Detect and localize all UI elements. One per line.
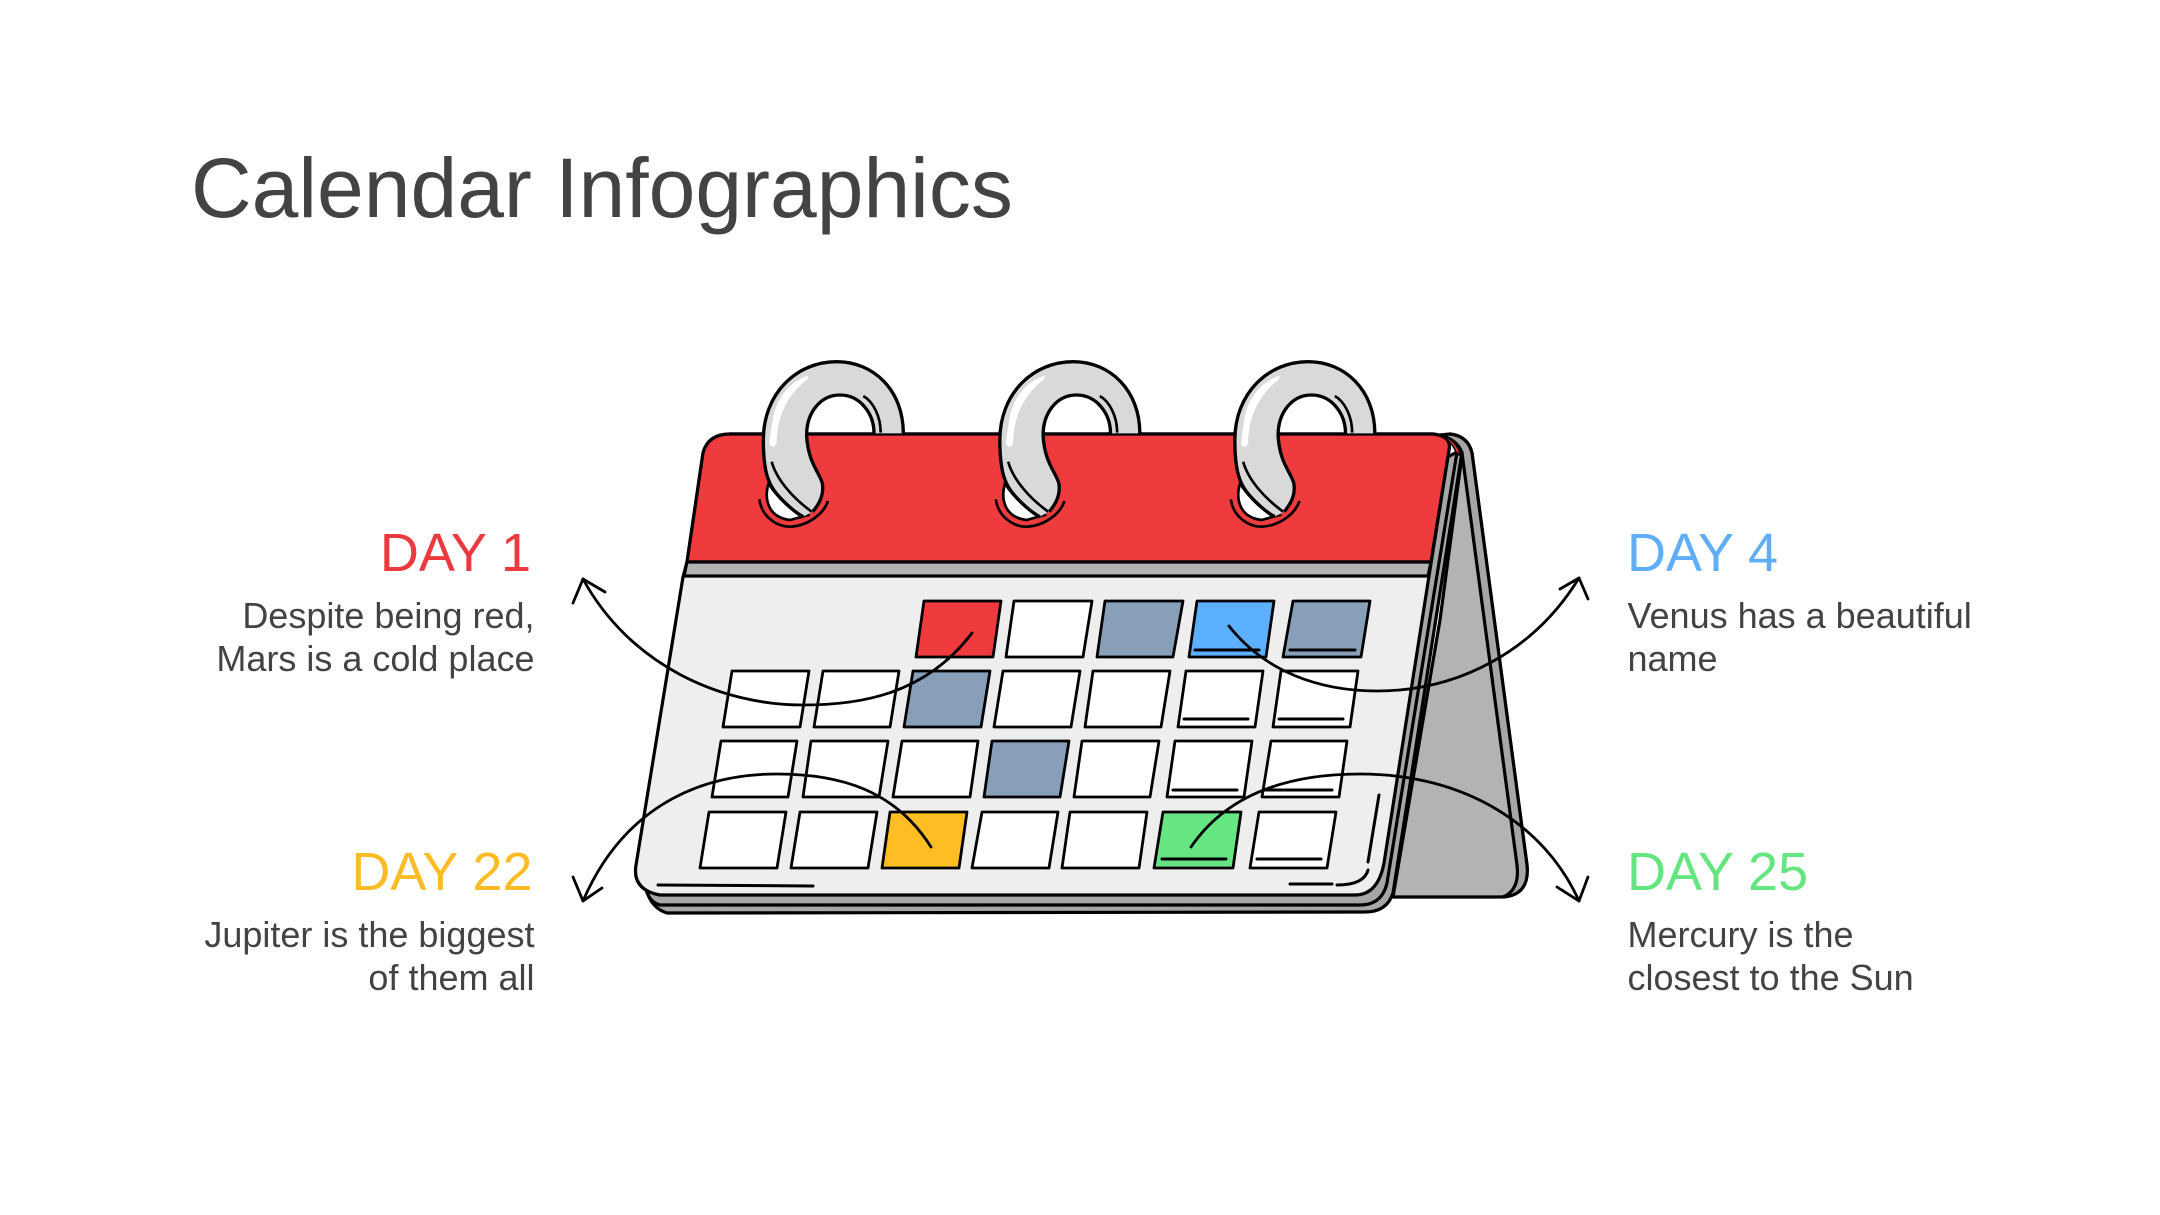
day 25 heading: DAY 25 <box>1627 842 1808 902</box>
callout: day 25 <box>1627 842 1914 998</box>
callout: day 1 <box>216 523 534 679</box>
binder ring 3 <box>1231 362 1375 527</box>
red corner wedge <box>1441 435 1461 456</box>
grey band under header <box>684 562 1431 576</box>
page corner wear lines <box>658 795 1379 886</box>
callout: day 22 <box>204 842 534 998</box>
day 22 text: of them all <box>368 957 534 998</box>
binder ring 2 <box>996 362 1140 527</box>
day 25 text: closest to the Sun <box>1628 957 1914 998</box>
arrow: day 25 <box>1191 774 1588 901</box>
day 4 text: name <box>1628 638 1718 679</box>
grid row 1 <box>916 601 1370 657</box>
callout: day 4 <box>1627 523 1972 679</box>
red header band <box>687 434 1449 562</box>
arrow: day 1 <box>573 579 972 705</box>
arrow: day 4 <box>1229 578 1588 691</box>
day 4 heading: DAY 4 <box>1627 523 1778 583</box>
arrow: day 22 <box>573 774 931 901</box>
day 25 text: Mercury is the <box>1628 914 1854 955</box>
day 1 heading: DAY 1 <box>380 523 531 583</box>
calendar page stack <box>645 452 1462 913</box>
calendar illustration <box>636 362 1527 913</box>
binder ring 1 <box>759 362 903 527</box>
calendar back stand <box>1393 434 1527 897</box>
day 1 text: Mars is a cold place <box>216 638 534 679</box>
day 22 text: Jupiter is the biggest <box>204 914 534 955</box>
calendar day grid <box>700 601 1370 868</box>
day 1 text: Despite being red, <box>242 595 534 636</box>
grid row 2 <box>723 671 1358 727</box>
title: Calendar Infographics <box>191 141 1013 235</box>
cell underlines <box>1162 650 1355 859</box>
grid row 3 <box>712 741 1347 797</box>
calendar front page <box>636 434 1449 895</box>
day 4 text: Venus has a beautiful <box>1628 595 1972 636</box>
day 22 heading: DAY 22 <box>351 842 532 902</box>
grid row 4 <box>700 812 1336 868</box>
